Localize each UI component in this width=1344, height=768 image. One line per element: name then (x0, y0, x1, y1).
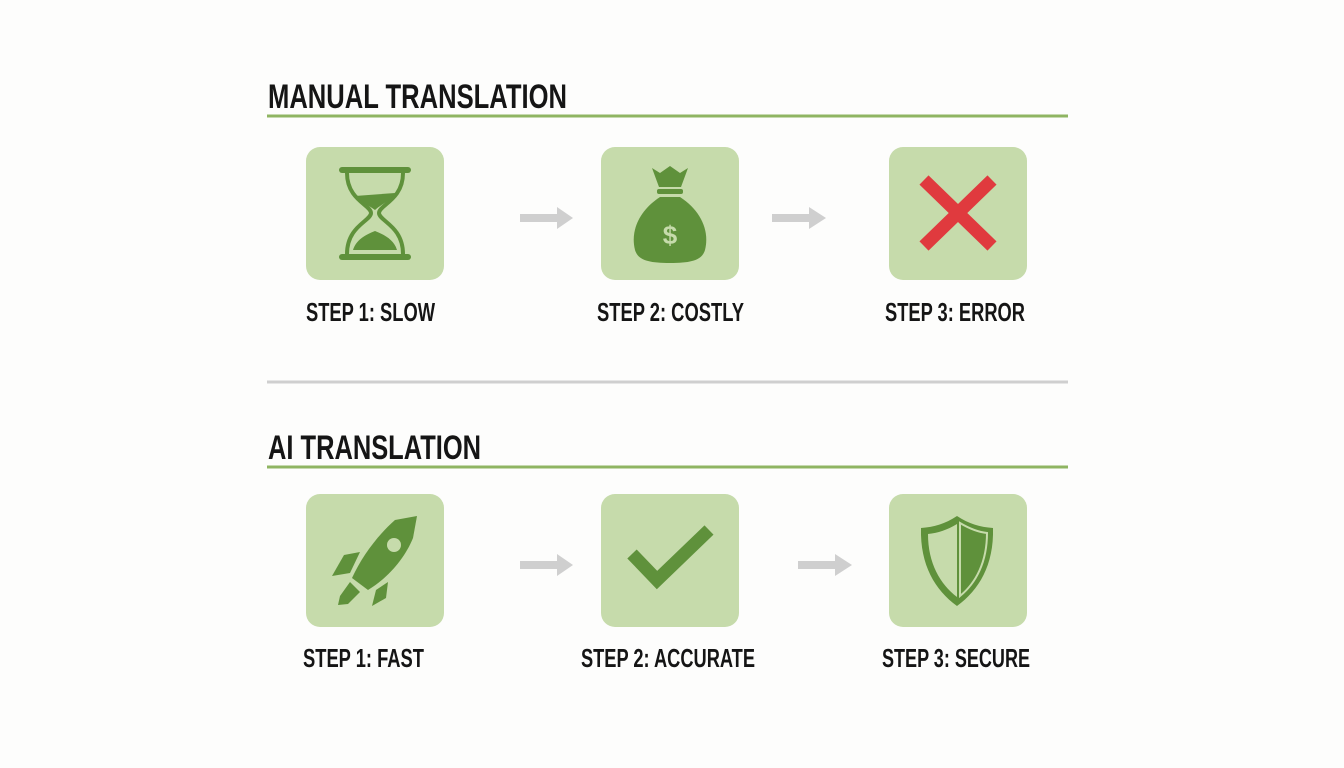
icon: money bag (601, 147, 739, 280)
label: step 1 slow: STEP 1: SLOW (306, 297, 435, 327)
icon: check mark (601, 494, 739, 627)
label: step 3 secure: STEP 3: SECURE (882, 643, 1030, 673)
title: manual translation: MANUAL TRANSLATION (268, 78, 567, 116)
icon: rocket (306, 494, 444, 627)
arrow (520, 554, 573, 576)
icon: money bag: $ (663, 220, 678, 250)
panel: manual steps (306, 147, 1027, 327)
arrow (772, 207, 826, 229)
label: step 2 costly: STEP 2: COSTLY (597, 297, 744, 327)
label: step 1 fast: STEP 1: FAST (303, 643, 424, 673)
title: ai translation: AI TRANSLATION (268, 429, 481, 467)
label: step 3 error: STEP 3: ERROR (885, 297, 1025, 327)
icon: hourglass (306, 147, 444, 280)
label: step 2 accurate: STEP 2: ACCURATE (581, 643, 755, 673)
icon: shield (889, 494, 1027, 627)
arrow (798, 554, 852, 576)
icon: red X (889, 147, 1027, 280)
panel: ai steps (303, 494, 1030, 673)
arrow (520, 207, 573, 229)
